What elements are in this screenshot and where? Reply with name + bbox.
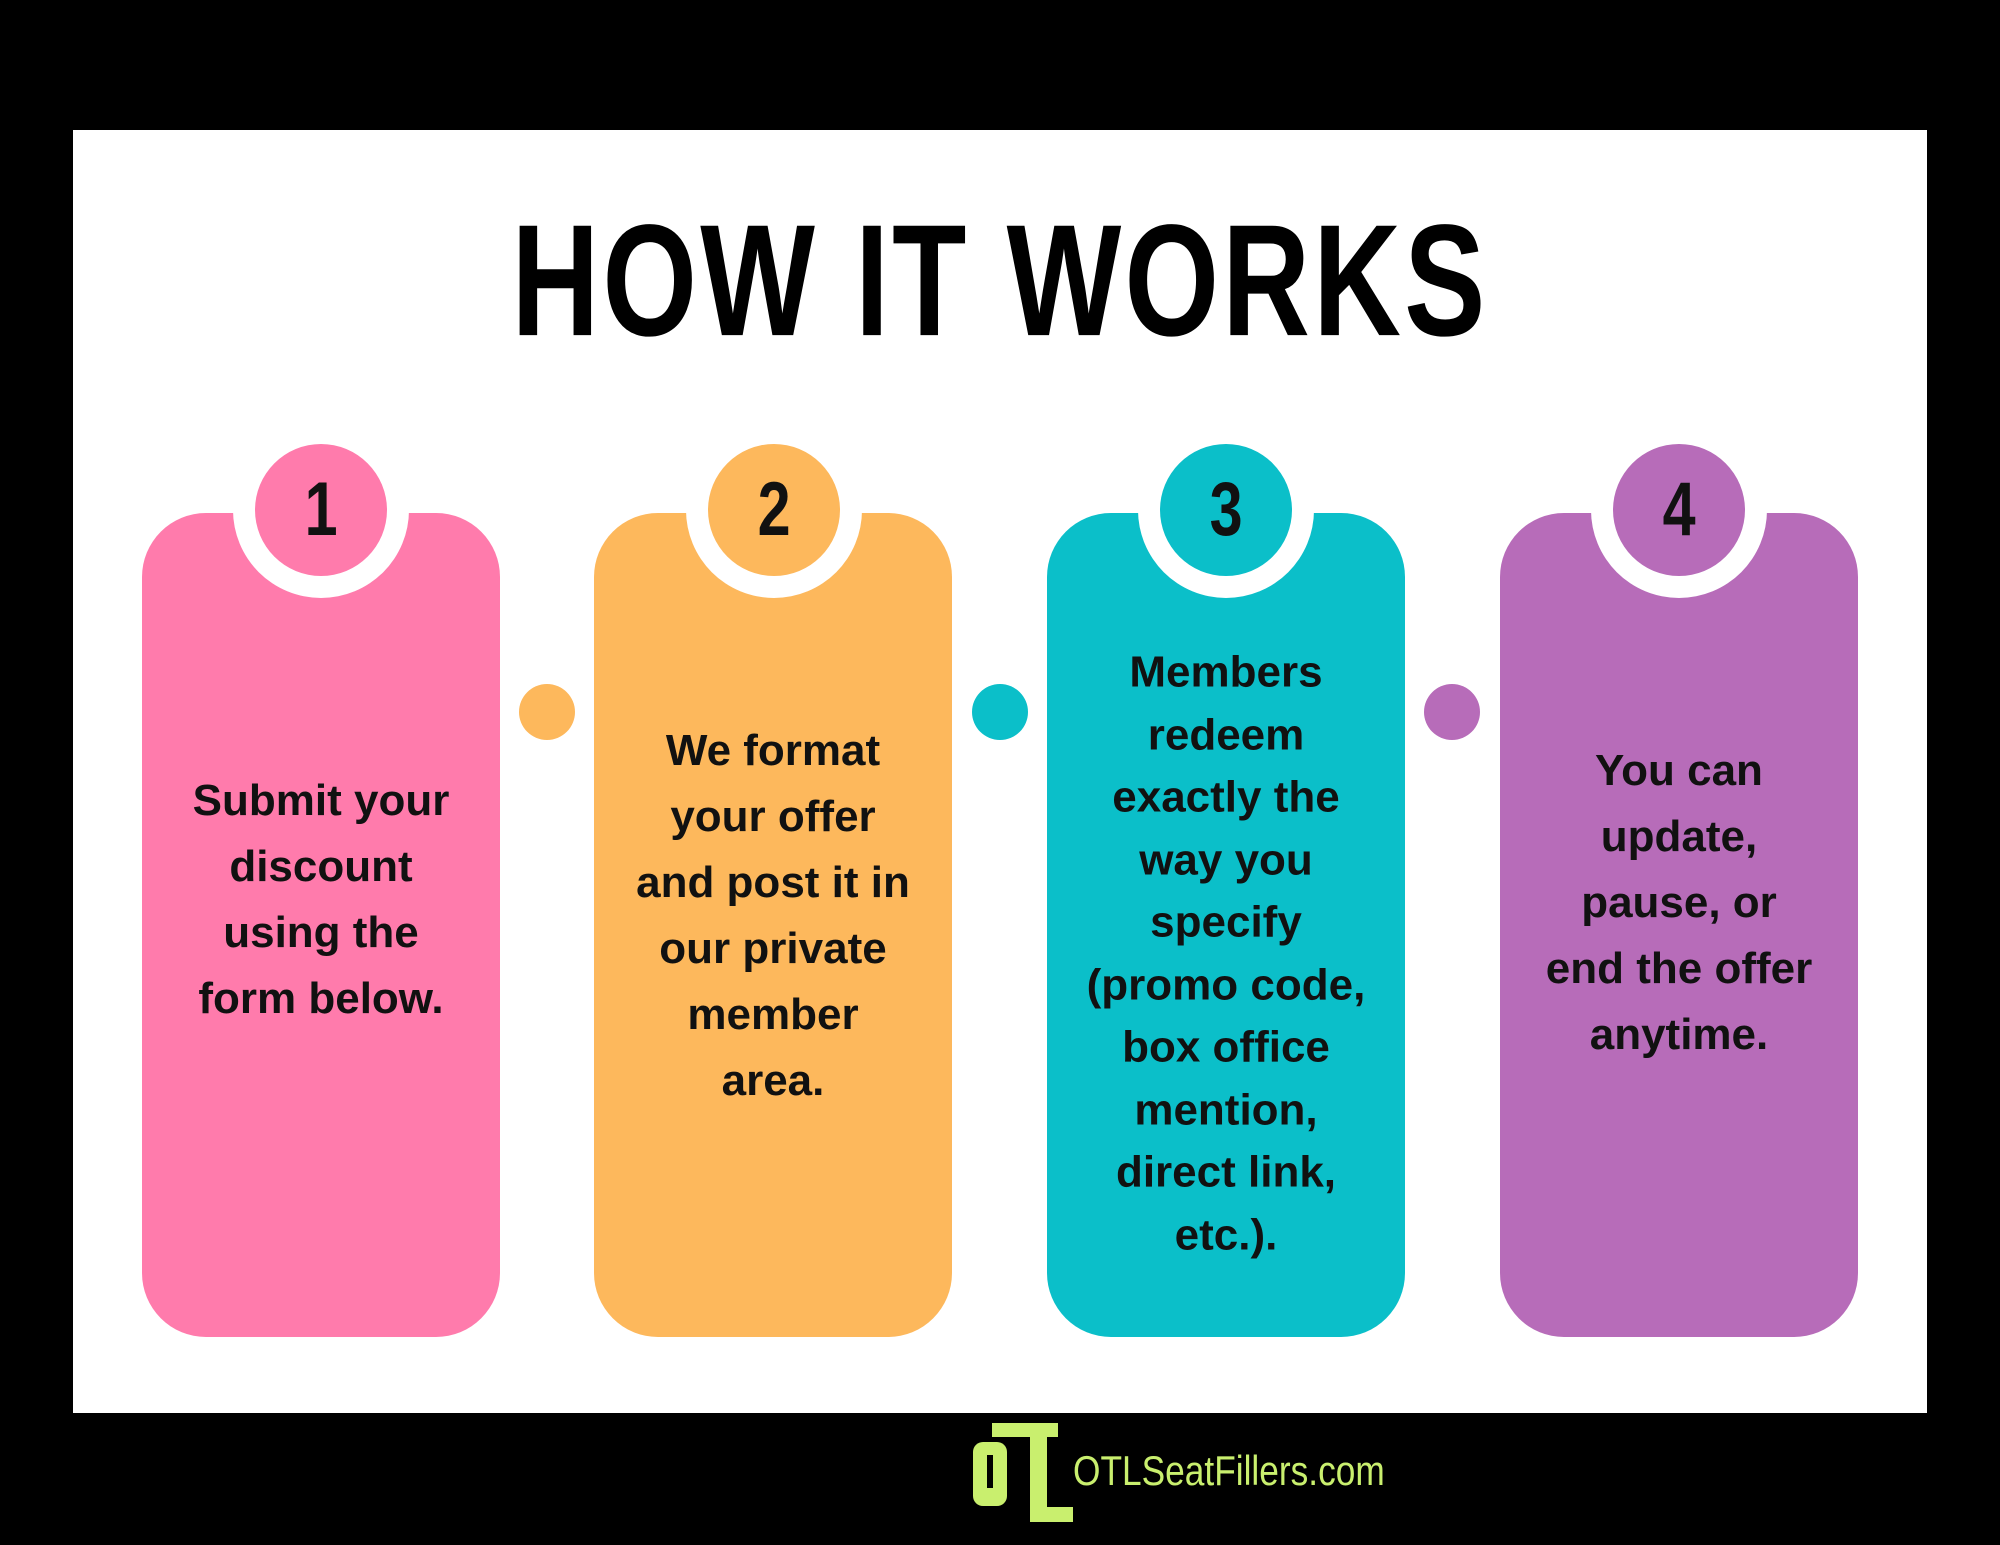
ring 2 (686, 422, 862, 598)
number 2 (708, 444, 840, 576)
card 1 (142, 513, 500, 1337)
ring 3 (1138, 422, 1314, 598)
text 4: pause, or (1581, 878, 1777, 927)
text 1: Submit your (193, 776, 449, 825)
text 3: mention, (1134, 1085, 1318, 1134)
number 4: 4 (1663, 467, 1695, 552)
text 2: member (687, 990, 859, 1039)
white panel (73, 130, 1927, 1413)
card 3 (1047, 513, 1405, 1337)
number 2: 2 (758, 467, 790, 552)
text 4 (1546, 746, 1812, 1059)
text 3: redeem (1148, 710, 1304, 759)
text 1: form below. (198, 974, 444, 1023)
logo icon (973, 1423, 1073, 1522)
text 2: We format (666, 726, 880, 775)
text 4: update, (1601, 812, 1757, 861)
text 3: (promo code, (1087, 960, 1365, 1009)
text 2 (636, 726, 910, 1105)
connector dot 1 (519, 684, 575, 740)
text 3: box office (1122, 1022, 1330, 1072)
text 1: using the (223, 908, 419, 957)
text 3: specify (1150, 898, 1302, 946)
connector dot 2 (972, 684, 1028, 740)
text 3: exactly the (1112, 772, 1340, 822)
text 4: anytime. (1590, 1010, 1768, 1059)
number 3: 3 (1210, 467, 1242, 552)
ring 1 (233, 422, 409, 598)
card 2 (594, 513, 952, 1337)
text 3: way you (1139, 835, 1313, 884)
number 3 (1160, 444, 1292, 576)
text 3: etc.). (1175, 1210, 1277, 1259)
card 4 (1500, 513, 1858, 1337)
text 1: discount (229, 842, 413, 891)
text 2: and post it in (636, 858, 910, 907)
number 1: 1 (305, 467, 337, 552)
text 3: Members (1129, 648, 1323, 696)
text 4: end the offer (1546, 944, 1812, 993)
ring 4 (1591, 422, 1767, 598)
number 4 (1613, 444, 1745, 576)
logo (973, 1423, 1385, 1522)
text 3: direct link, (1116, 1148, 1336, 1196)
logo text: OTLSeatFillers.com (1073, 1447, 1385, 1494)
text 3 (1087, 648, 1365, 1259)
connector dot 3 (1424, 684, 1480, 740)
text 1 (193, 776, 449, 1023)
title: HOW IT WORKS (511, 191, 1489, 369)
text 2: your offer (670, 792, 876, 841)
text 2: our private (659, 924, 887, 973)
text 2: area. (722, 1056, 824, 1105)
text 4: You can (1595, 746, 1763, 795)
number 1 (255, 444, 387, 576)
